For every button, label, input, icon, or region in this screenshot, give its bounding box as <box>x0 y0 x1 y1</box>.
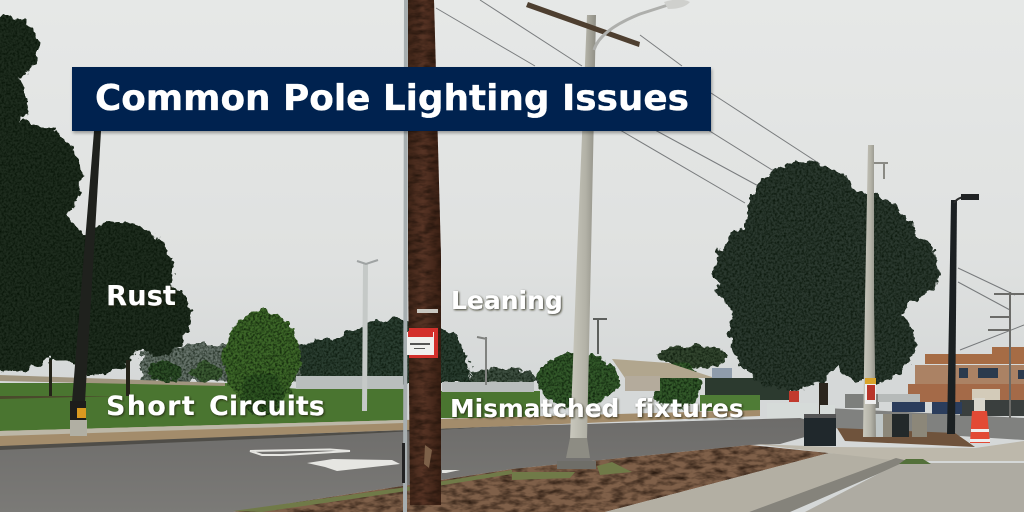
grass patches <box>233 462 632 512</box>
curb right <box>749 458 908 512</box>
pole: concrete street light <box>526 0 690 469</box>
lawn <box>0 375 760 431</box>
parked cars <box>845 394 1024 416</box>
power lines <box>436 0 1024 350</box>
distant hills <box>140 344 300 382</box>
building: tan barn <box>612 359 790 411</box>
road <box>0 418 837 512</box>
sign on pole <box>407 328 438 358</box>
title banner <box>72 67 711 131</box>
far road right <box>826 408 1024 440</box>
traffic cone <box>970 398 990 443</box>
label: Short Circuits: Circuits <box>209 391 325 422</box>
pole: small light <box>477 337 487 385</box>
bushes and low hedges <box>147 353 701 409</box>
pole: black pole left <box>70 131 101 436</box>
distant treeline <box>300 318 726 384</box>
tree: left large trees <box>0 16 191 374</box>
building: brick right <box>908 347 1024 402</box>
curb and verge <box>0 410 760 450</box>
road markings <box>250 450 460 473</box>
grass tuft <box>899 459 931 464</box>
tree: big right tree <box>714 162 939 390</box>
bush: green round tree <box>224 311 300 416</box>
label: Leaning: Leaning <box>451 286 563 315</box>
sidewalk <box>605 453 900 512</box>
utility boxes <box>874 414 927 437</box>
label: Mismatched fixtures: Mismatched <box>450 394 619 423</box>
small red sign <box>789 391 799 402</box>
pole: concrete right <box>863 145 888 437</box>
pole: distant utility <box>593 318 607 354</box>
dirt median <box>233 445 829 512</box>
pole: far utility right <box>988 292 1024 418</box>
dirt bed right <box>837 428 975 447</box>
title banner: Common Pole Lighting Issues <box>95 78 689 119</box>
bin <box>804 414 836 446</box>
label: Mismatched fixtures: fixtures <box>635 394 744 423</box>
label: Rust: Rust <box>106 281 176 312</box>
pole: wooden foreground <box>402 0 441 512</box>
fence <box>296 376 534 392</box>
tree trunks <box>49 360 130 396</box>
pole: thin street light <box>357 260 378 411</box>
pole: black light right <box>947 194 979 434</box>
white barrier <box>767 403 835 421</box>
concrete lot <box>805 463 1024 512</box>
label: Short Circuits: Short <box>106 391 196 422</box>
